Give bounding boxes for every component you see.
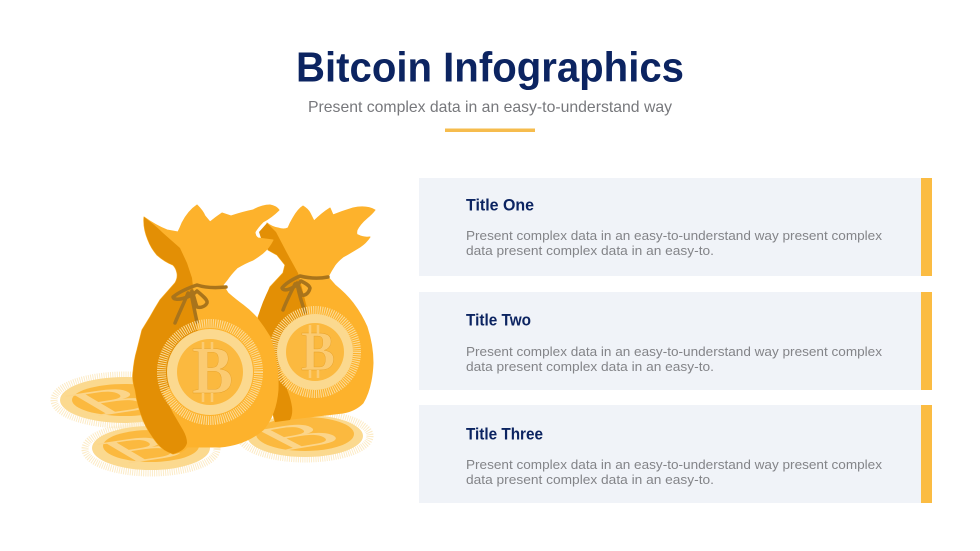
money bag: back bbox=[255, 206, 375, 422]
coin: ground right: B bbox=[235, 415, 360, 457]
body text three: Present complex data in an easy-to-understand way present complex bbox=[466, 457, 883, 472]
bitcoin coin: front bag: B bbox=[192, 332, 233, 408]
body text two bbox=[466, 344, 883, 374]
subtitle: Present complex data in an easy-to-understand way bbox=[308, 99, 672, 116]
accent bar three bbox=[921, 405, 932, 503]
coin: ground left: B bbox=[50, 379, 176, 423]
panel: title two bbox=[419, 292, 932, 390]
coin: ground front: B bbox=[82, 428, 203, 470]
bitcoin coin: back bag: B bbox=[301, 321, 335, 383]
title: Bitcoin Infographics bbox=[296, 44, 684, 90]
body text one: data present complex data in an easy-to. bbox=[466, 243, 714, 258]
body text three bbox=[466, 457, 883, 487]
bitcoin coin: front bag bbox=[162, 324, 258, 420]
body text three: data present complex data in an easy-to. bbox=[466, 472, 714, 487]
body text two: Present complex data in an easy-to-understand way present complex bbox=[466, 344, 883, 359]
bitcoin coin: back bag bbox=[273, 310, 357, 394]
title underline bbox=[445, 128, 535, 132]
illustration: bitcoin money bags and coins bbox=[50, 205, 375, 473]
heading three: Title Three bbox=[466, 426, 543, 444]
body text one: Present complex data in an easy-to-understand way present complex bbox=[466, 228, 883, 243]
money bag: front bbox=[133, 205, 279, 454]
body text two: data present complex data in an easy-to. bbox=[466, 359, 714, 374]
heading one: Title One bbox=[466, 196, 534, 214]
panel: title one bbox=[419, 178, 932, 276]
accent bar two bbox=[921, 292, 932, 390]
accent bar one bbox=[921, 178, 932, 276]
heading two: Title Two bbox=[466, 312, 531, 330]
panel: title three bbox=[419, 405, 932, 503]
body text one bbox=[466, 228, 883, 258]
